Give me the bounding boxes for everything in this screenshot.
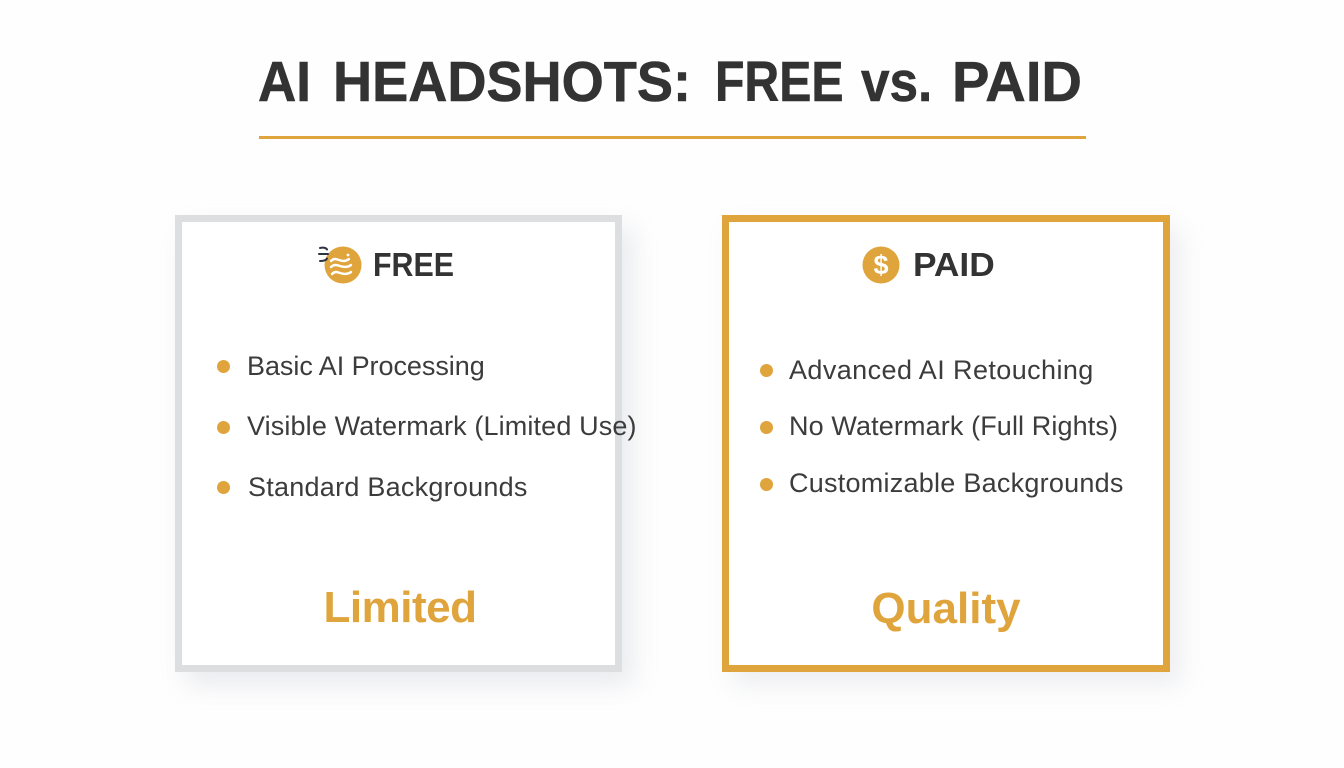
item: Advanced AI Retouching xyxy=(789,355,1094,385)
free heading: FREE xyxy=(373,246,454,283)
item: Visible Watermark (Limited Use) xyxy=(247,411,637,441)
bullet list: free xyxy=(217,351,637,502)
panel: paid xyxy=(722,215,1182,686)
bullet dot xyxy=(217,481,230,494)
item: Customizable Backgrounds xyxy=(789,468,1124,498)
paid card frame xyxy=(722,215,1170,672)
icon: dollar coin xyxy=(862,246,900,284)
bullet dot xyxy=(217,360,230,373)
title: AI xyxy=(258,50,311,114)
bullet list: paid xyxy=(760,355,1124,498)
title xyxy=(258,50,1082,114)
free verdict: Limited xyxy=(324,583,476,632)
title: FREE xyxy=(714,50,843,114)
paid heading: PAID xyxy=(913,246,995,283)
panel: free xyxy=(175,215,637,688)
title: HEADSHOTS: xyxy=(333,50,691,114)
free card frame xyxy=(175,215,622,672)
bullet dot xyxy=(217,421,230,434)
paid verdict: Quality xyxy=(871,584,1021,633)
title: PAID xyxy=(952,50,1082,114)
item: Basic AI Processing xyxy=(247,351,485,381)
bullet dot xyxy=(760,421,773,434)
item: No Watermark (Full Rights) xyxy=(789,411,1118,441)
bullet dot xyxy=(760,364,773,377)
icon: waves coin xyxy=(318,246,362,284)
title: vs. xyxy=(861,50,932,114)
title underline xyxy=(259,136,1086,139)
bullet dot xyxy=(760,478,773,491)
icon: dollar coin: $ xyxy=(873,250,889,280)
item: Standard Backgrounds xyxy=(248,472,528,502)
